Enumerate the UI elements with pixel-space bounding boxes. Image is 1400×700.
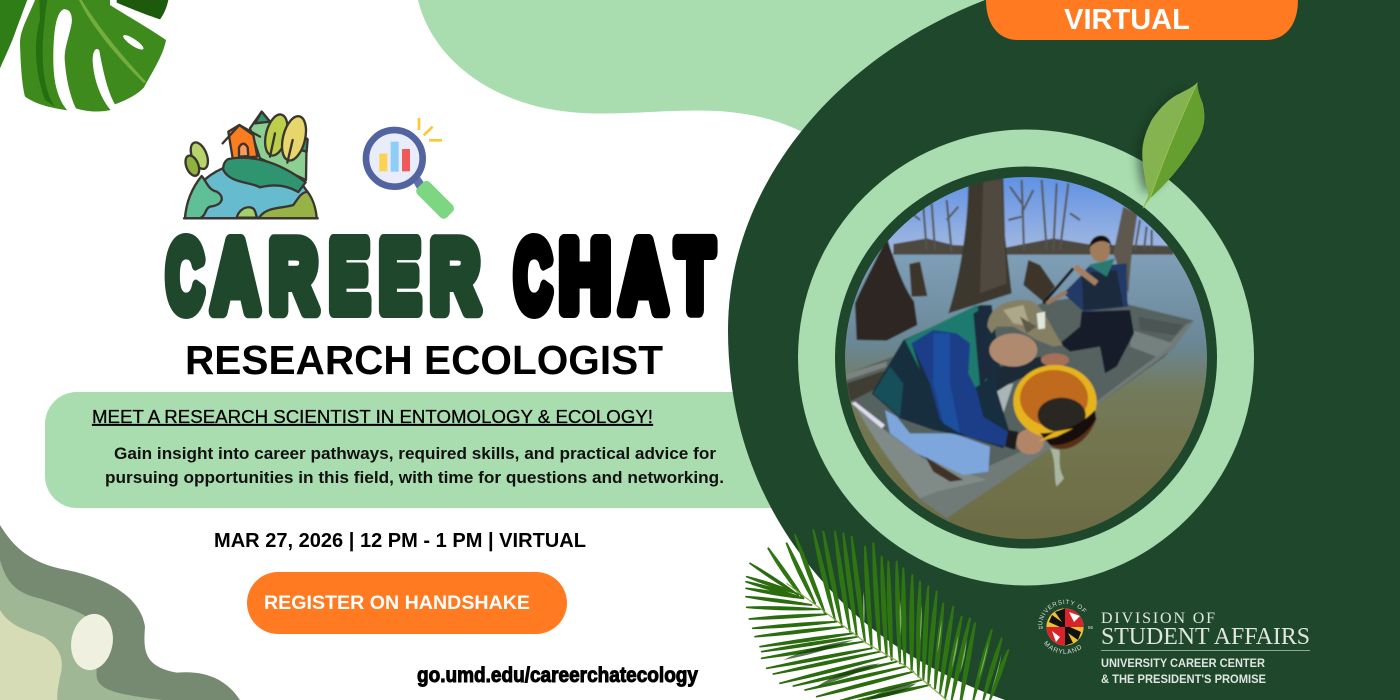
yellow sieve bucket <box>1013 365 1097 487</box>
logo seal: 18 <box>1038 625 1044 630</box>
icon: earth with house and trees <box>183 112 318 218</box>
logo wordmark: & THE PRESIDENT'S PROMISE <box>1101 672 1266 686</box>
icon: palm frond <box>746 530 1008 700</box>
boat <box>847 298 1194 518</box>
back researcher <box>1043 235 1134 373</box>
title word: CAREER: A <box>212 220 259 332</box>
badge: virtual <box>986 0 1298 40</box>
photo frame: dark inner ring <box>835 166 1217 548</box>
title word: CHAT: C <box>514 220 552 332</box>
title word: CHAT: A <box>620 220 667 332</box>
photo: two researchers in a boat on a swamp <box>840 170 1220 550</box>
logo seal: MARYLAND <box>1044 640 1082 654</box>
panel: description band <box>45 392 845 508</box>
text block: description <box>105 444 724 487</box>
badge: virtual: VIRTUAL <box>1064 4 1190 36</box>
logo wordmark <box>1101 610 1310 686</box>
icon: green leaf <box>1138 83 1204 208</box>
logo wordmark: UNIVERSITY CAREER CENTER <box>1101 656 1265 670</box>
title word: CHAT: T <box>676 220 714 332</box>
title word: CAREER: R <box>269 220 317 332</box>
title word: CAREER: C <box>166 220 204 332</box>
icon: monstera leaf top-left <box>0 0 168 112</box>
front researcher <box>872 300 1069 482</box>
button: register on handshake: REGISTER ON HANDSHAKE <box>264 593 530 614</box>
text block: description: Gain insight into career pathways, required skills, and practical advice for <box>114 444 716 463</box>
logo seal: 56 <box>1088 625 1094 630</box>
decoration: bottom-left organic waves <box>0 525 240 700</box>
title word: CAREER: R <box>430 220 479 332</box>
icon: magnifying glass with bar chart <box>366 118 456 221</box>
logo: university of maryland division of student affairs <box>1038 600 1310 686</box>
title word: CAREER: E <box>329 220 369 332</box>
background: light green top blob <box>418 0 1000 136</box>
logo seal <box>1038 600 1094 654</box>
background: dark green right panel <box>728 0 1400 700</box>
logo seal: UNIVERSITY OF <box>1038 600 1087 625</box>
heading: meet a research scientist: MEET A RESEARCH SCIENTIST IN ENTOMOLOGY & ECOLOGY! <box>92 407 653 427</box>
text block: description: pursuing opportunities in this field, with time for questions and networking. <box>105 468 724 487</box>
text: event date and time: MAR 27, 2026 | 12 PM - 1 PM | VIRTUAL <box>214 530 586 552</box>
button: register on handshake <box>247 572 567 634</box>
title word: CHAT: H <box>559 220 610 332</box>
photo frame: light green ring <box>798 130 1254 586</box>
logo wordmark: STUDENT AFFAIRS <box>1101 624 1310 650</box>
text: registration url: go.umd.edu/careerchatecology <box>417 664 698 687</box>
title word: CAREER: E <box>379 220 420 332</box>
title: CAREER CHAT <box>166 220 714 332</box>
subtitle: research ecologist: RESEARCH ECOLOGIST <box>185 337 663 383</box>
logo wordmark: DIVISION OF <box>1101 610 1215 627</box>
